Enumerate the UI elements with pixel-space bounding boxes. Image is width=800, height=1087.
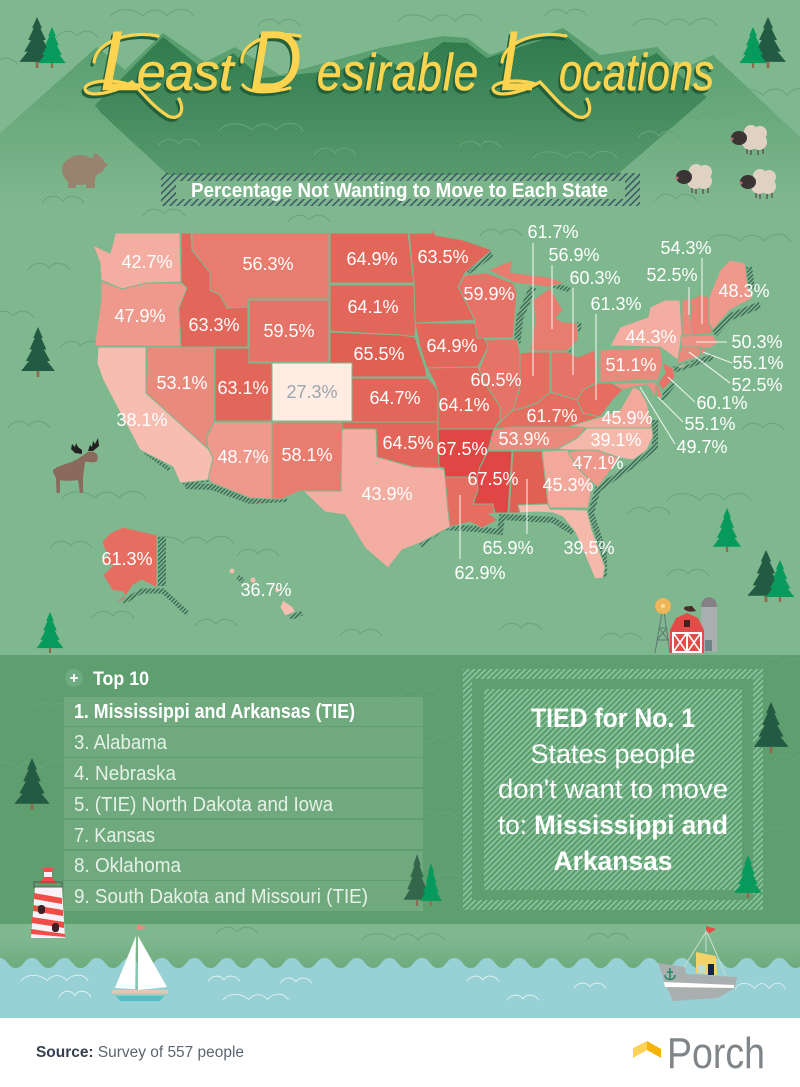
icon: tree panel right [753, 702, 789, 753]
state percentage labels: 59.5% [263, 321, 315, 341]
state percentage labels: 48.3% [718, 281, 770, 301]
state percentage labels: 50.3% [731, 332, 783, 352]
state: Washington [93, 233, 181, 289]
state: Idaho [179, 233, 248, 347]
state percentage labels: 27.3% [286, 382, 338, 402]
callout: tied for no. 1: to: Mississippi and [498, 810, 728, 840]
state percentage labels: 64.9% [346, 249, 398, 269]
row 6 [64, 851, 423, 880]
state percentage labels: 42.7% [121, 252, 173, 272]
state percentage labels: 63.5% [417, 247, 469, 267]
icon: tree near oregon [21, 327, 55, 377]
subtitle banner [161, 173, 640, 206]
icon: sailboat [112, 924, 168, 1001]
state: Kansas [352, 378, 438, 422]
state percentage labels: 45.3% [542, 475, 594, 495]
state: Georgia [542, 450, 593, 508]
lower panel background [0, 655, 800, 924]
top 10 heading: Top 10 [93, 669, 149, 690]
row 5: 7. Kansas [74, 825, 155, 847]
state percentage labels: 45.9% [601, 408, 653, 428]
state: Vermont [682, 299, 692, 335]
state: Pennsylvania [600, 347, 663, 382]
state percentage labels: 51.1% [605, 355, 657, 375]
title: D esirable [250, 13, 479, 108]
state percentage labels: 56.3% [242, 254, 294, 274]
state: Louisiana [445, 477, 498, 528]
state: Delaware [655, 383, 663, 398]
state percentage labels: 36.7% [240, 580, 292, 600]
logo: Porch: Porch [667, 1029, 765, 1078]
state: Arizona [207, 422, 272, 499]
state: Montana [192, 233, 329, 308]
state percentage labels: 48.7% [217, 447, 269, 467]
state: Kentucky [494, 392, 600, 429]
state percentage labels: 53.9% [498, 429, 550, 449]
state: Ohio [551, 350, 596, 400]
row 3 [64, 758, 423, 787]
leader lines [460, 243, 732, 559]
sea [0, 958, 800, 1018]
footer [0, 1018, 800, 1087]
state: Iowa [415, 323, 488, 368]
state: Alabama [509, 451, 548, 513]
state percentage labels: 47.9% [114, 306, 166, 326]
icon: trees top left [19, 17, 66, 68]
state: Hawaii [230, 569, 295, 616]
callout: tied for no. 1: don't want to move [498, 774, 728, 804]
callout: tied for no. 1 [463, 669, 763, 910]
state percentage labels: 60.1% [696, 393, 748, 413]
icon: moose [53, 438, 99, 493]
state percentage labels: 64.1% [438, 395, 490, 415]
state percentage labels: 54.3% [660, 238, 712, 258]
state percentage labels [101, 222, 784, 600]
state percentage labels: 64.7% [369, 388, 421, 408]
state: Maine [709, 260, 753, 330]
row 4: 5. (TIE) North Dakota and Iowa [74, 794, 334, 816]
icon: lighthouse [31, 868, 65, 938]
state: Rhode Island [701, 347, 707, 356]
row 7: 9. South Dakota and Missouri (TIE) [74, 886, 368, 908]
icon: green tree panel right [734, 855, 762, 898]
coastline hatching [123, 254, 760, 618]
state: West Virginia [577, 383, 623, 417]
subtitle banner: Percentage Not Wanting to Move to Each State [191, 180, 608, 202]
state percentage labels: 61.3% [590, 294, 642, 314]
panel hill doodles [0, 658, 800, 881]
state percentage labels: 65.9% [482, 538, 534, 558]
state percentage labels: 55.1% [684, 414, 736, 434]
state percentage labels: 60.5% [470, 370, 522, 390]
icon: tree south west [37, 612, 63, 653]
state: Mississippi [473, 451, 512, 513]
state percentage labels: 62.9% [454, 563, 506, 583]
state: Wisconsin [458, 273, 517, 338]
icon: sheep group [676, 125, 776, 199]
state percentage labels: 63.3% [188, 315, 240, 335]
state: Maryland [612, 382, 656, 398]
state percentage labels: 61.3% [101, 549, 153, 569]
state percentage labels: 53.1% [156, 373, 208, 393]
state: South Carolina [568, 450, 620, 487]
state percentage labels: 67.5% [436, 439, 488, 459]
row 3: 4. Nebraska [74, 763, 177, 785]
state: Colorado [272, 363, 352, 421]
state: Alaska [100, 527, 157, 605]
state: Wyoming [249, 300, 329, 362]
state: Illinois [478, 339, 520, 422]
title: L ocations [500, 15, 714, 109]
row 4 [64, 789, 423, 818]
state: Tennessee [488, 427, 587, 450]
state percentage labels: 64.5% [382, 433, 434, 453]
state: Nevada [146, 347, 214, 448]
background hill doodles [0, 9, 800, 640]
state percentage labels: 61.7% [527, 222, 579, 242]
state percentage labels: 47.1% [572, 453, 624, 473]
state: Massachusetts [681, 335, 718, 348]
state: Indiana [513, 352, 550, 410]
row 5 [64, 820, 423, 849]
top 10 list [64, 697, 423, 911]
state percentage labels: 52.5% [731, 375, 783, 395]
state: Virginia [570, 387, 652, 428]
state percentage labels: 64.9% [426, 336, 478, 356]
row 7 [64, 881, 423, 911]
state: North Dakota [330, 233, 414, 283]
icon: bear [62, 154, 108, 188]
state percentage labels: 61.7% [526, 406, 578, 426]
state percentage labels: 60.3% [569, 268, 621, 288]
icon: farm with barn, silo and windmill [655, 597, 717, 653]
state: Minnesota [409, 227, 492, 323]
mountains behind title [0, 28, 800, 208]
state percentage labels: 52.5% [646, 265, 698, 285]
state percentage labels: 56.9% [548, 245, 600, 265]
top 10 heading [65, 669, 149, 690]
state percentage labels: 44.3% [625, 327, 677, 347]
state: Oregon [95, 281, 187, 346]
state: Texas [303, 429, 450, 568]
state: Connecticut [677, 347, 700, 364]
title [85, 13, 714, 117]
state: Florida [518, 504, 605, 579]
state: New Hampshire [690, 295, 713, 335]
shore hill doodles [216, 927, 629, 941]
state: California [97, 347, 213, 483]
state percentage labels: 43.9% [361, 484, 413, 504]
state: New Mexico [272, 422, 342, 499]
icon: tree east [713, 508, 741, 552]
state: Arkansas [438, 429, 494, 477]
state percentage labels: 59.9% [463, 284, 515, 304]
icon: trees panel centre [404, 854, 442, 906]
title: Least [100, 14, 236, 108]
shoreline shade [0, 940, 800, 970]
state percentage labels: 67.5% [467, 469, 519, 489]
icon: trees south east [747, 550, 794, 602]
state percentage labels: 38.1% [116, 410, 168, 430]
state: Oklahoma [342, 422, 440, 468]
row 1 [64, 697, 423, 726]
callout: tied for no. 1: Arkansas [554, 846, 672, 876]
state: South Dakota [330, 285, 417, 337]
state: Missouri [427, 367, 500, 429]
callout: tied for no. 1: TIED for No. 1 [531, 703, 695, 733]
state: Nebraska [330, 332, 427, 377]
row 1: 1. Mississippi and Arkansas (TIE) [74, 701, 355, 723]
state percentage labels: 64.1% [347, 297, 399, 317]
state: New York [610, 300, 692, 368]
logo: Porch [633, 1029, 765, 1078]
row 6: 8. Oklahoma [74, 855, 182, 877]
state percentage labels: 63.1% [217, 378, 269, 398]
state percentage labels: 39.1% [590, 430, 642, 450]
state percentage labels: 49.7% [676, 437, 728, 457]
icon: trees top right [739, 17, 786, 68]
map: United States choropleth [93, 227, 753, 616]
state: Utah [215, 348, 272, 421]
state percentage labels: 65.5% [353, 344, 405, 364]
state: Michigan [488, 260, 578, 351]
icon: fishing boat [658, 926, 737, 1001]
row 2 [64, 727, 423, 757]
state percentage labels: 39.5% [563, 538, 615, 558]
state percentage labels: 55.1% [732, 353, 784, 373]
state: New Jersey [658, 362, 675, 390]
row 2: 3. Alabama [74, 732, 168, 754]
state: North Carolina [557, 428, 653, 460]
icon: tree panel left [14, 758, 50, 810]
sea wave doodles [21, 975, 785, 1000]
callout: tied for no. 1: States people [530, 739, 696, 769]
state percentage labels: 58.1% [281, 445, 333, 465]
source note: Source: Survey of 557 people [36, 1044, 244, 1061]
